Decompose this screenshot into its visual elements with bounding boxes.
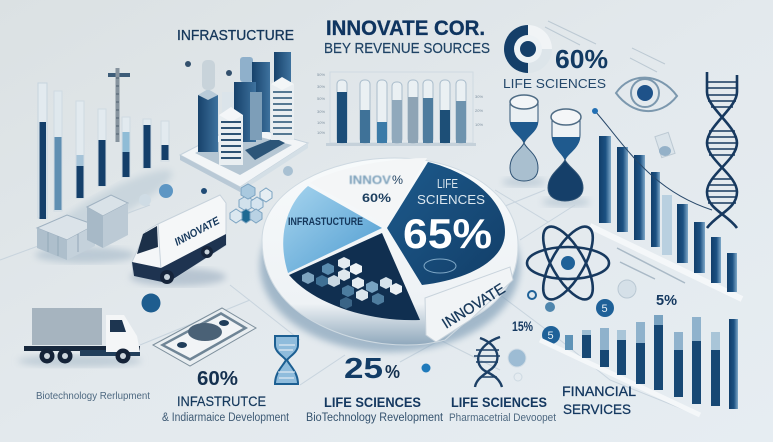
icons: dollar coins: 5 (548, 330, 554, 342)
pie label: 60%: INNOV (349, 173, 391, 187)
icon: small science circles (422, 349, 526, 381)
bar chart: descending blue bars (590, 136, 742, 299)
hexagon tiles on navy slice (302, 257, 402, 309)
icon: DNA helix (707, 72, 737, 228)
icon: hexagon cluster (230, 184, 272, 223)
text block: financial services: FINANCIAL (562, 383, 636, 399)
text block: financial services (562, 383, 636, 417)
bar chart: top centre test tubes: 10% (475, 122, 483, 127)
icon: banknote (153, 308, 256, 366)
label: 15%: 15% (512, 318, 533, 334)
bar chart: top centre test tubes: 20% (475, 108, 483, 113)
bar chart: top centre test tubes: 50% (317, 96, 325, 101)
bar chart: top centre test tubes: 30% (475, 94, 483, 99)
pie label: innovate wedge (425, 267, 513, 342)
bar chart: top centre test tubes: 30% (317, 109, 325, 114)
title: BEY REVENUE SOURCES (324, 40, 490, 57)
pie label: infrastructure: INFRASTUCTURE (288, 216, 363, 228)
heading: infrastructure: INFRASTUCTURE (177, 27, 294, 44)
icons: dollar coins (528, 280, 636, 344)
pie label: 60%: % (392, 173, 403, 187)
stat: life sciences pharmaceutical: Pharmacetrial Devoopet (449, 412, 556, 424)
icon: atom (527, 219, 609, 307)
stat: 25% life sciences: 25 (344, 353, 383, 385)
stat: 60% infrastructure: INFASTRUTCE (177, 393, 266, 409)
stat: 25% life sciences: % (385, 362, 400, 382)
stat: 60% infrastructure: 60% (197, 368, 238, 390)
text: biotechnology equipment caption: Biotechnology Rerlupment (36, 390, 150, 402)
slice: infrastructure (283, 186, 382, 273)
donut chart: life sciences 60% (503, 25, 608, 91)
pie label: life sciences 65%: 65% (403, 210, 492, 257)
pie label: 60% (349, 173, 403, 205)
icon: eye (616, 78, 677, 111)
stat: life sciences pharmaceutical: LIFE SCIENCES (451, 394, 547, 410)
bar chart: top centre test tubes: 10% (317, 120, 325, 125)
bar chart: top centre test tubes: 10% (317, 130, 325, 135)
icon: stacked crates (35, 195, 135, 263)
stat: 60% infrastructure: & Indiarmaice Development (162, 412, 290, 424)
label: 5%: 5% (656, 292, 677, 309)
slice: life sciences 65% (387, 162, 505, 285)
slice: white 60% (310, 158, 427, 225)
title (324, 17, 490, 57)
icon: delivery van: INNOVATE (173, 215, 222, 249)
pie label: 60%: 60% (362, 191, 391, 205)
pie label: life sciences 65%: SCIENCES (417, 192, 485, 207)
slice: dark navy with hexagons (289, 233, 420, 320)
icon: hourglass left (502, 95, 546, 187)
bar chart: top centre test tubes (317, 72, 483, 146)
pie chart: revenue split (260, 158, 520, 352)
donut chart: life sciences 60%: LIFE SCIENCES (503, 76, 606, 91)
stat: 60% infrastructure (162, 368, 290, 424)
stat: life sciences pharmaceutical (449, 394, 556, 424)
pie label: life sciences 65% (403, 176, 492, 273)
illustration: city buildings on platform (180, 52, 308, 192)
stat: 25% life sciences: BioTechnology Revelopment (306, 412, 444, 424)
icon: hourglass helix bottom (275, 336, 298, 384)
bar chart: top centre test tubes: 30% (317, 84, 325, 89)
line: trend from node to DNA (592, 108, 712, 210)
bar chart: left test tube bars (38, 83, 178, 250)
pie label: innovate wedge: INNOVATE (439, 280, 508, 332)
icon: DNA bottom (474, 337, 502, 387)
icon: hourglass right (542, 109, 590, 207)
pie base rim (262, 158, 518, 345)
icons: small network nodes (139, 61, 293, 206)
pie label: life sciences 65%: LIFE (437, 176, 458, 191)
faint label: financial notes (617, 248, 685, 283)
icon: construction crane (108, 68, 130, 142)
icons: dollar coins: 5 (602, 303, 608, 315)
text block: financial services: SERVICES (563, 401, 631, 417)
bar chart: top centre test tubes: 50% (317, 72, 325, 77)
title: INNOVATE COR. (326, 17, 485, 40)
icon: faint document notes (545, 21, 675, 158)
donut chart: life sciences 60%: 60% (555, 44, 608, 74)
stat: 25% life sciences: LIFE SCIENCES (324, 394, 421, 410)
icon: delivery van (130, 195, 226, 286)
stat: 25% life sciences (306, 353, 444, 424)
icon: cargo truck (18, 308, 142, 367)
bar chart: ascending financial bars (540, 315, 738, 415)
decorative guide lines (0, 190, 690, 412)
icon: blue sphere (142, 294, 160, 312)
